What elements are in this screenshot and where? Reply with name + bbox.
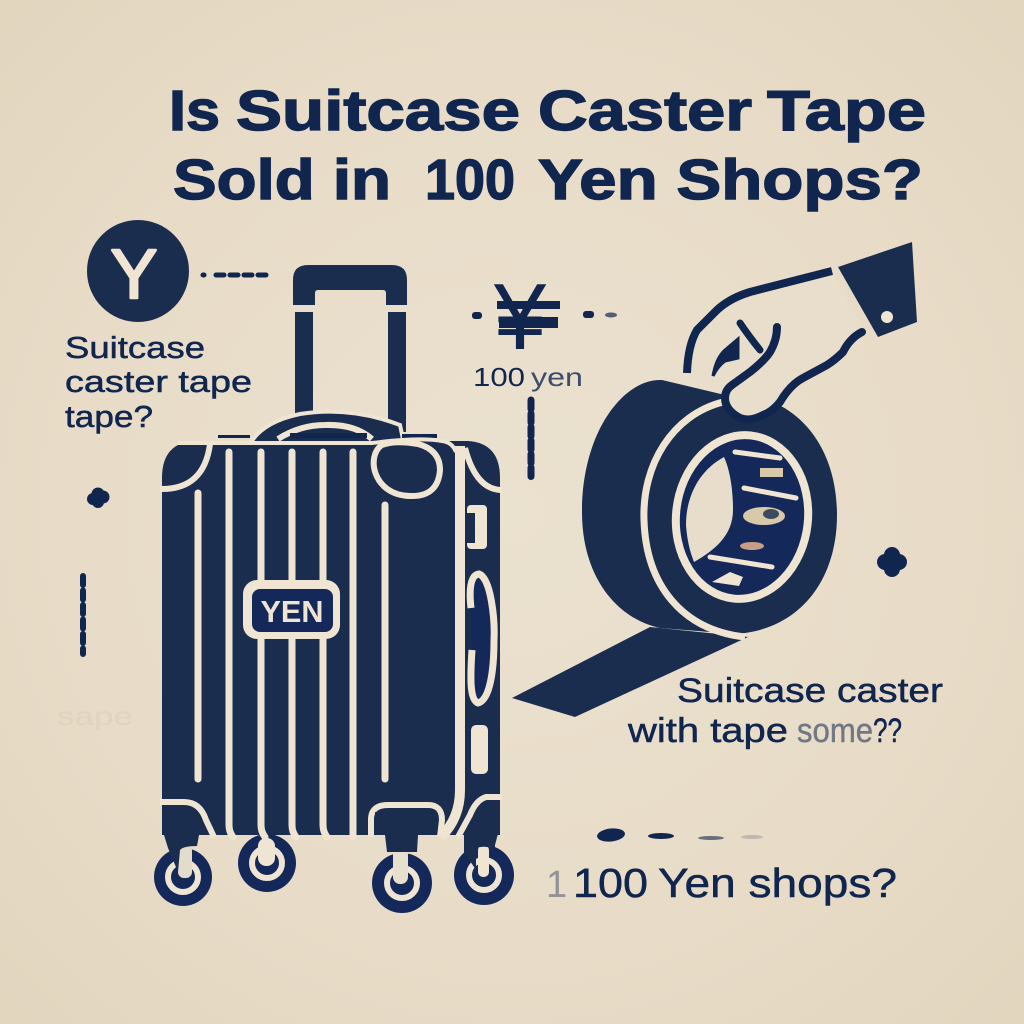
hand back outline (687, 271, 832, 373)
text: suitcase caster with tape: some (797, 712, 873, 750)
title: Sold in (173, 148, 391, 212)
hand fill (687, 272, 868, 419)
cuff (838, 242, 917, 337)
text: 100 yen shops: 100 (573, 860, 648, 906)
icon: Y badge (87, 220, 189, 322)
icon: small clover right (877, 547, 907, 577)
icon: Y badge: Y (111, 235, 157, 313)
wheel: rear right (372, 835, 432, 913)
title (169, 79, 926, 212)
text: suitcase caster with tape: with tape (627, 712, 788, 750)
title: Is (169, 79, 220, 143)
suitcase (154, 265, 514, 913)
title: Caster (538, 79, 752, 143)
finger lines (740, 323, 760, 350)
title: Yen Shops? (538, 148, 923, 212)
text: 100 yen (473, 362, 583, 392)
text: suitcase caster with tape (627, 672, 943, 750)
text: 100 yen: yen (531, 362, 583, 392)
wheel: front left (154, 835, 212, 906)
side bracket bottom (471, 725, 488, 774)
text: 100 yen shops: Yen shops? (658, 860, 897, 906)
dashes: yen symbol (472, 311, 617, 319)
dashed line left (80, 576, 86, 654)
title: Suitcase (236, 79, 520, 143)
front panel edge (441, 446, 460, 837)
inner tape marks (710, 452, 796, 567)
hand (687, 242, 917, 419)
tape hole (686, 457, 733, 562)
dashed line under 100 yen (528, 400, 534, 478)
top seam (178, 439, 456, 452)
rear wheel bracket (375, 812, 436, 835)
tape front edge (644, 402, 745, 637)
title: 100 (425, 148, 515, 212)
YEN label: YEN (260, 594, 324, 629)
tape strip (512, 627, 748, 717)
icon: small clover left (87, 488, 110, 508)
text: suitcase caster tape question: Suitcase (65, 330, 205, 365)
dashes: bottom (596, 827, 763, 843)
text: suitcase caster with tape: Suitcase caster (677, 672, 943, 710)
corner bumpers (160, 442, 502, 837)
ribs (198, 452, 385, 837)
tape inner ring (668, 429, 816, 605)
faint ghost text left: sape (57, 701, 133, 731)
suitcase body (162, 441, 500, 835)
text: 100 yen shops (546, 860, 897, 906)
side bracket top (465, 505, 487, 549)
text: suitcase caster tape question: tape? (65, 399, 153, 434)
tape roll (512, 380, 837, 717)
icon: yen symbol: ¥ (493, 264, 547, 369)
top handle (218, 412, 437, 444)
text: suitcase caster tape question (65, 330, 252, 434)
cuff button (881, 311, 893, 323)
side grip handle (470, 574, 494, 703)
text: 100 yen shops: 1 (546, 864, 567, 906)
text: 100 yen: 100 (473, 362, 525, 392)
telescopic handle (293, 265, 407, 432)
dashed connector: Y badge (203, 272, 268, 278)
text: suitcase caster with tape: ?? (873, 712, 902, 750)
tape outer (582, 380, 837, 634)
wheel: front right (454, 830, 514, 905)
thumb outline (725, 327, 862, 419)
wheel: rear left (238, 834, 296, 892)
text: suitcase caster tape question: caster tape (65, 364, 252, 399)
title: Tape (767, 79, 926, 143)
YEN label (243, 580, 340, 639)
